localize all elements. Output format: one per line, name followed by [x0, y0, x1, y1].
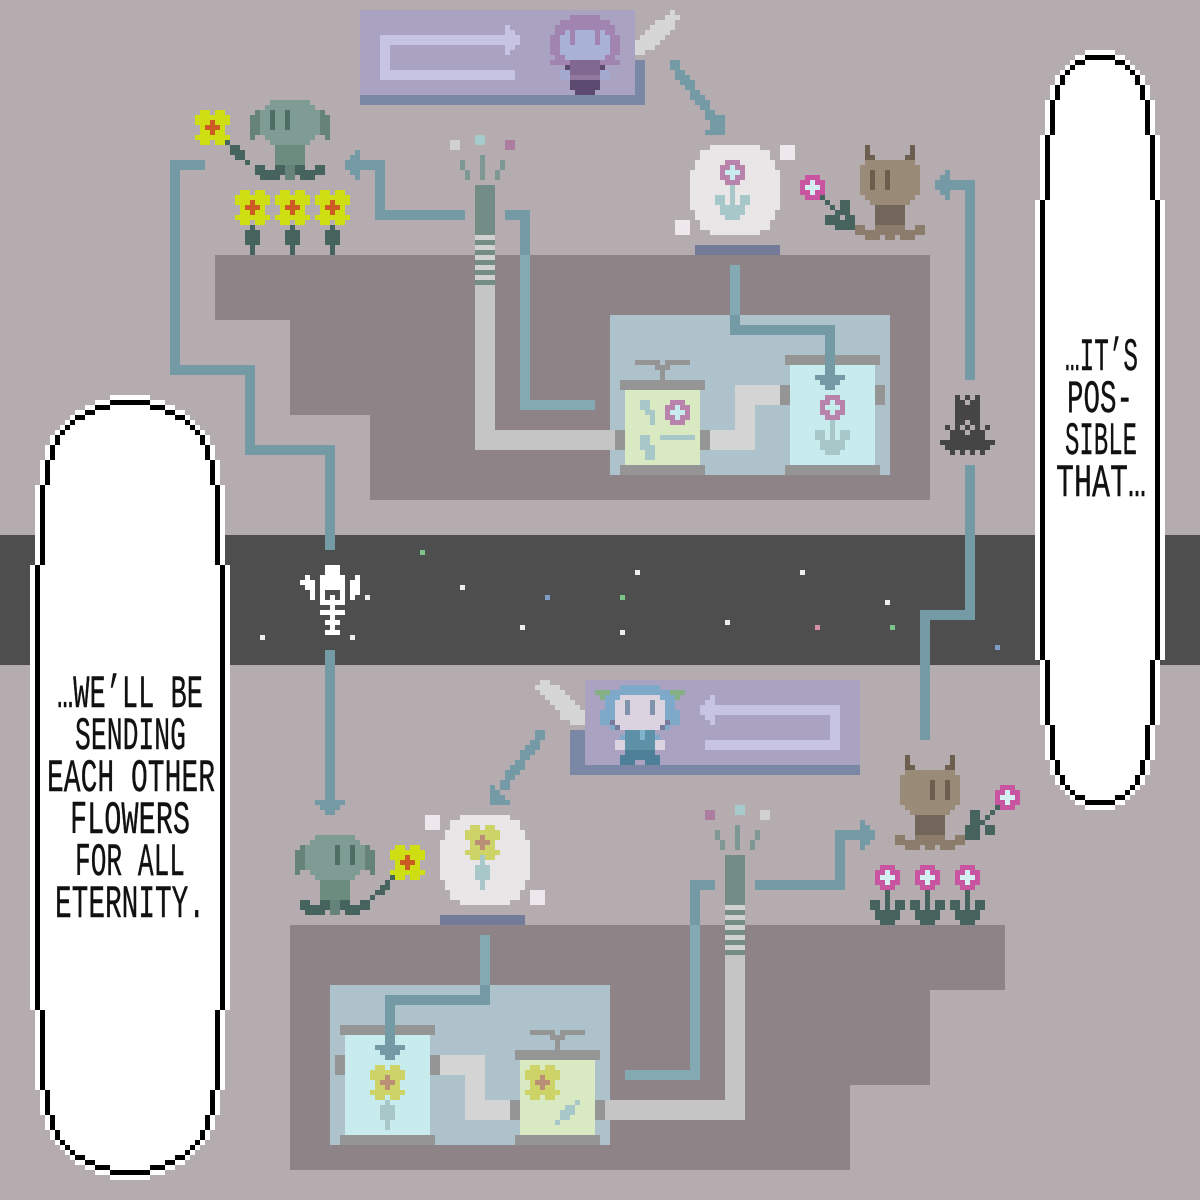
yellow flower held by bottom creature	[370, 845, 425, 900]
cat: top	[855, 145, 925, 240]
bubble text: left: SENDING	[75, 711, 186, 763]
pink flower held by top cat	[800, 175, 855, 230]
bubble text: right: POS-	[1067, 374, 1133, 426]
arrow: right path up through ghost to cat	[920, 170, 975, 740]
arrow: bottom note to orb	[490, 730, 545, 805]
icon: top orb with pink flower	[675, 145, 795, 255]
light link pipe	[440, 1055, 510, 1120]
icon: bottom feather	[535, 680, 585, 725]
speech bubble: left	[30, 395, 230, 1180]
panel: lower underground lab	[290, 925, 1005, 1170]
icon: bottom orb with yellow flower	[425, 815, 545, 925]
blue tank	[780, 355, 885, 475]
bubble text: left: …WE’LL BE	[57, 669, 203, 721]
bubble text: right	[1056, 332, 1146, 510]
arrow on sign	[700, 695, 840, 750]
lab room	[610, 315, 890, 475]
bubble text: left: FOR ALL	[75, 837, 185, 889]
bubble text: left: ETERNITY.	[55, 879, 205, 931]
cat: bottom	[895, 755, 965, 850]
bubble text: right: SIBLE	[1065, 416, 1137, 468]
sprayer: top	[450, 135, 515, 285]
arrow: top note to orb	[670, 60, 725, 135]
arrow: bottom orb to blue tank	[375, 935, 490, 1060]
purple character	[550, 15, 620, 95]
icon: white skeleton fish	[300, 565, 360, 635]
arrow: bottom sprayer to cat	[755, 820, 875, 890]
lab room	[330, 985, 610, 1145]
ground	[290, 925, 1005, 1170]
arrow: feed pipe bottom	[625, 880, 715, 1080]
green creature: top	[250, 100, 330, 180]
bubble text: right: THAT…	[1056, 458, 1146, 510]
arrow on sign	[380, 25, 520, 80]
panel: bottom sign with blue character	[570, 680, 860, 775]
speech bubble: right	[1035, 50, 1165, 810]
dark space band	[0, 535, 1200, 665]
sprayer: bottom	[705, 805, 770, 955]
panel: top sign with purple character	[360, 10, 645, 105]
arrow: orb to blue tank top	[730, 265, 845, 390]
pink flower row	[870, 865, 985, 925]
pink flower held by bottom cat	[965, 785, 1020, 840]
bubble text: left: FLOWERS	[70, 795, 190, 847]
arrow: long path from yellow flower through space to bottom creature	[170, 160, 345, 815]
gray feed pipe	[605, 955, 745, 1120]
icon: top feather	[635, 10, 680, 55]
green tank	[510, 1030, 605, 1145]
light link pipe	[710, 385, 780, 450]
blue tank	[335, 1025, 440, 1145]
arrow: sprayer to green creature	[345, 150, 465, 220]
yellow flower row	[235, 190, 350, 255]
yellow flower held by top creature	[195, 110, 250, 165]
green creature: bottom	[295, 835, 375, 915]
bubble text: left	[47, 669, 215, 931]
blue character	[595, 685, 685, 765]
bubble text: left: EACH OTHER	[47, 753, 215, 805]
icon: black ghost	[940, 395, 995, 455]
bubble text: right: …IT’S	[1065, 332, 1138, 384]
green tank	[615, 360, 710, 475]
arrow: feed pipe top	[505, 210, 595, 410]
ground	[215, 255, 930, 500]
gray feed pipe	[475, 285, 615, 450]
panel: upper underground lab	[215, 255, 930, 500]
